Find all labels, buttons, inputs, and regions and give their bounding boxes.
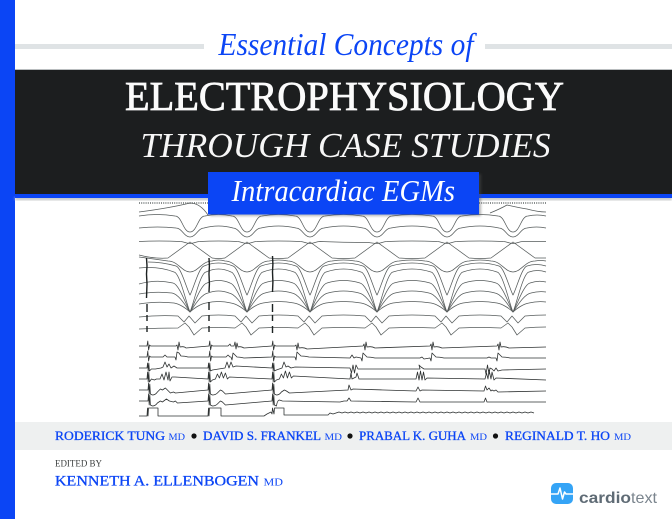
- editor label: EDITED BY: [55, 460, 102, 470]
- sidebar: blue left edge: [0, 0, 15, 519]
- series title: Essential Concepts of: [218, 26, 477, 62]
- author strip: RODERICK TUNG: [55, 429, 165, 443]
- pacing spikes: [146, 256, 273, 333]
- author strip: MD: [168, 433, 185, 443]
- title band: [15, 69, 672, 200]
- author strip: PRABAL K. GUHA: [359, 429, 466, 443]
- author strip: MD: [324, 433, 342, 443]
- logo: cardiotext: [551, 483, 658, 507]
- badge: Intracardiac EGMs: Intracardiac EGMs: [231, 173, 455, 208]
- intracardiac channels: [139, 341, 546, 416]
- author strip: DAVID S. FRANKEL: [203, 429, 321, 443]
- editor name: KENNETH A. ELLENBOGEN: [55, 474, 260, 490]
- logo: cardiotext: text: [631, 490, 658, 507]
- icon: heartbeat tile: [551, 483, 573, 504]
- chart: intracardiac electrogram tracings: [139, 203, 546, 416]
- author strip: MD: [614, 433, 631, 443]
- author strip: REGINALD T. HO: [505, 429, 610, 443]
- author strip: MD: [470, 433, 487, 443]
- rule left of series title: [15, 44, 204, 49]
- editor name: MD: [264, 476, 283, 488]
- rule right of series title: [485, 44, 672, 49]
- surface ECG leads: [139, 203, 546, 335]
- logo: cardiotext: cardio: [579, 490, 631, 507]
- main title: ELECTROPHYSIOLOGY: [125, 73, 564, 119]
- subtitle: THROUGH CASE STUDIES: [140, 126, 550, 165]
- author strip: [15, 422, 672, 450]
